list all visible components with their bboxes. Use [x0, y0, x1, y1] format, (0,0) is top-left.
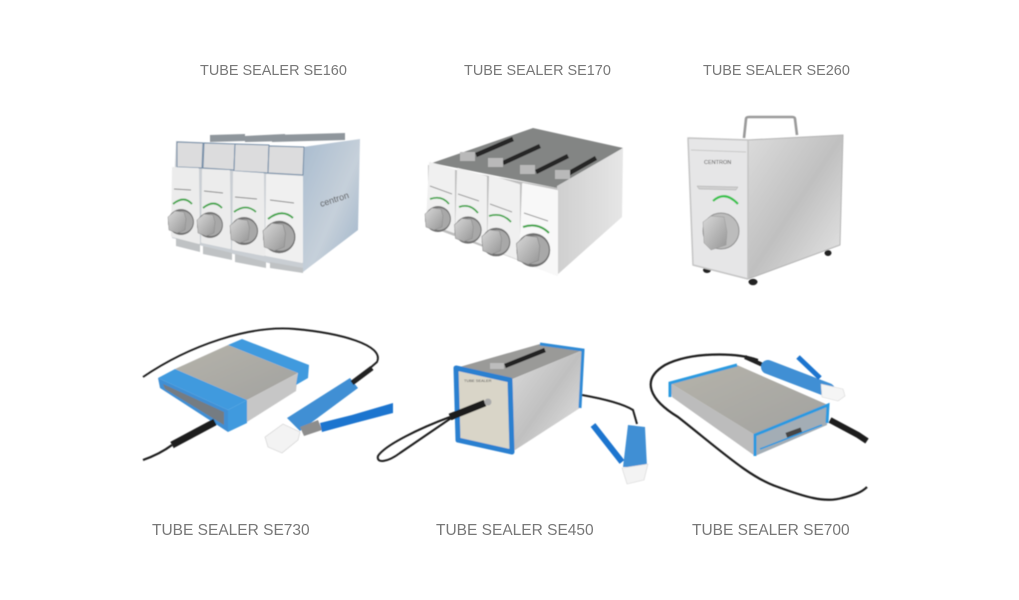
connector and lower cable: [143, 422, 215, 460]
top clamps: [210, 133, 345, 142]
handle: [744, 117, 797, 138]
handle strain relief: [352, 368, 372, 383]
knob: [703, 213, 739, 250]
side panel: centron: [319, 190, 350, 209]
module 1: [425, 163, 454, 232]
clamp tip: [622, 464, 648, 484]
side panel: [510, 350, 583, 452]
front panel: [688, 138, 748, 279]
product: SE260 single-unit sealer with handle: [688, 117, 843, 285]
clamp handle: [623, 425, 647, 467]
title: TUBE SEALER SE730: TUBE SEALER SE730: [152, 522, 310, 539]
top surface: [432, 128, 623, 188]
module 3: [230, 172, 264, 255]
back blue edge: [540, 344, 583, 408]
product: SE450 benchtop sealer: [378, 344, 648, 484]
top surface: [456, 344, 583, 380]
clamp handle: [768, 367, 828, 390]
back frame: [172, 141, 303, 272]
handle connector: [745, 357, 765, 366]
title: TUBE SEALER SE170: TUBE SEALER SE170: [464, 63, 611, 79]
output connector: [830, 420, 867, 441]
box top: [175, 345, 298, 400]
connector and cable loop: [378, 398, 492, 461]
front panel: CENTRON: [704, 160, 731, 166]
output cable: [582, 395, 637, 424]
clamp tip: [265, 424, 300, 453]
product: SE160 four-module sealer: [168, 133, 360, 273]
clamp lever: [798, 357, 820, 378]
module 4: [516, 184, 557, 275]
product: SE730 portable sealer: [143, 328, 393, 460]
cable: [143, 328, 378, 382]
clamp lever: [320, 403, 393, 432]
front panel: [456, 368, 512, 452]
title: TUBE SEALER SE260: TUBE SEALER SE260: [703, 63, 850, 79]
product: SE700 flat portable sealer: [651, 355, 867, 500]
clamp hinge: [300, 420, 322, 436]
module 4: [263, 175, 302, 262]
blue edges: [670, 365, 828, 456]
front corner: [228, 400, 247, 432]
cartridge slots: [476, 139, 596, 175]
clamp tip: [821, 384, 845, 401]
upper blocks: [177, 142, 304, 175]
module 2: [454, 169, 486, 245]
box side: [670, 383, 755, 456]
latches: [460, 152, 570, 179]
lower blocks: [176, 238, 303, 273]
front backing: [428, 165, 557, 275]
front face: [158, 378, 228, 432]
title: TUBE SEALER SE700: TUBE SEALER SE700: [692, 522, 850, 539]
module 1: [168, 168, 199, 243]
side panel: [747, 135, 843, 279]
clamp lever: [593, 425, 622, 462]
box top: [670, 365, 828, 435]
front band top: [158, 369, 247, 410]
title: TUBE SEALER SE160: TUBE SEALER SE160: [200, 63, 347, 79]
long cable: [651, 355, 867, 500]
feet: [703, 250, 832, 285]
module 3: [482, 176, 519, 259]
side panel: [303, 139, 360, 272]
front panel: [755, 405, 828, 456]
title: TUBE SEALER SE450: TUBE SEALER SE450: [436, 522, 594, 539]
clamp handle: [287, 378, 358, 431]
box side: [247, 373, 298, 422]
side panel: [557, 148, 623, 275]
front panel: TUBE SEALER: [464, 378, 492, 383]
module 2: [197, 170, 230, 248]
product: SE170 four-module sealer: [425, 128, 623, 275]
rear blue band: [228, 339, 309, 385]
